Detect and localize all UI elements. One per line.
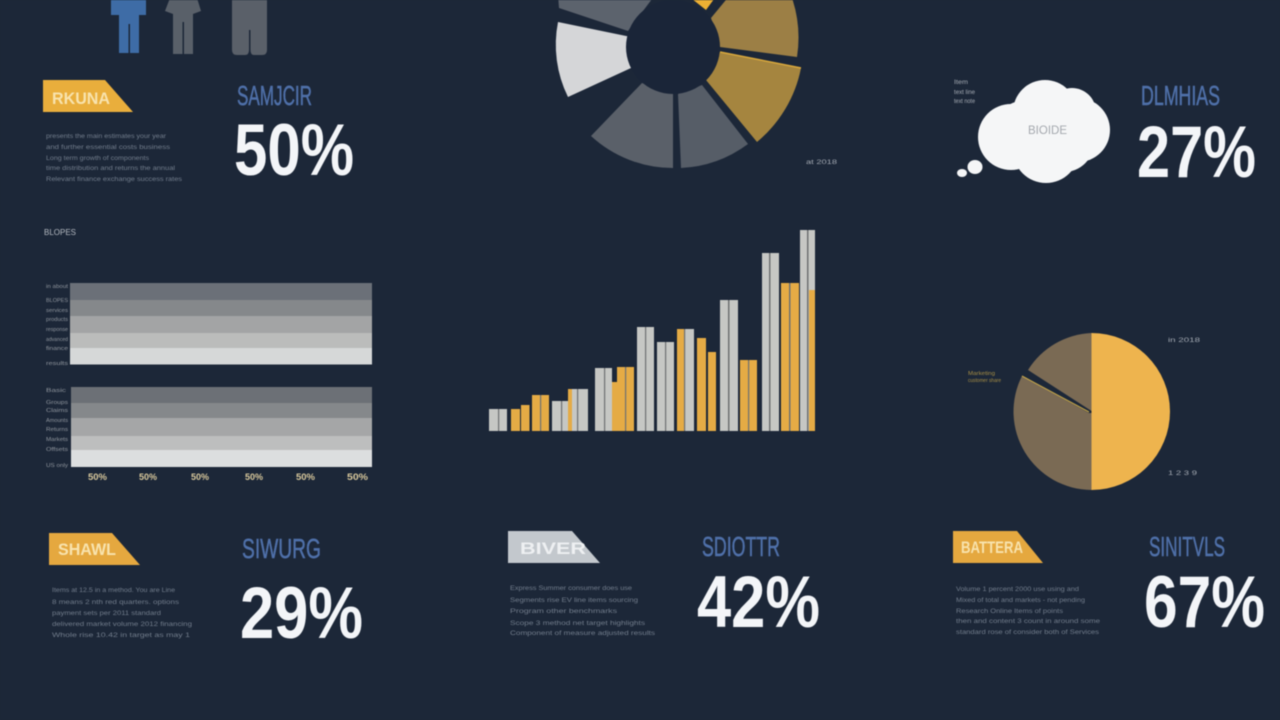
light bars <box>489 230 815 431</box>
body text: Scope 3 method net target highlights <box>510 620 646 627</box>
axis labels: 50% <box>139 472 157 482</box>
row labels: US only <box>46 463 68 469</box>
percentage: 27% <box>1137 112 1256 193</box>
row labels: Offsets <box>46 447 68 453</box>
body text: 8 means 2 nth red quarters. options <box>52 599 180 606</box>
icon: grey woman <box>165 0 201 54</box>
body text: Items at 12.5 in a method. You are Line <box>52 587 175 594</box>
percentage: 42% <box>697 562 820 643</box>
orange bars <box>511 283 815 431</box>
cloud text note: text line <box>954 89 975 96</box>
body text: Component of measure adjusted results <box>510 630 656 637</box>
body text: Research Online Items of points <box>956 608 1064 615</box>
slice: lower left brown <box>1014 376 1092 490</box>
icon: blue man <box>111 0 146 53</box>
icon group: people <box>111 0 267 55</box>
tag <box>49 533 140 565</box>
row labels: in about <box>46 284 69 290</box>
stacked bands chart <box>44 228 372 482</box>
tag <box>508 531 600 563</box>
segment: yellow <box>687 0 717 10</box>
row labels: services <box>46 308 68 314</box>
stat block: 50% <box>43 80 354 191</box>
row labels: results <box>46 361 68 367</box>
segment: top left grey <box>558 0 655 31</box>
tag <box>43 80 133 112</box>
body text: presents the main estimates your year <box>46 133 167 140</box>
body text: Volume 1 percent 2000 use using and <box>956 586 1079 593</box>
cloud label: BIOIDE <box>1028 123 1067 137</box>
row labels: finance <box>46 346 68 352</box>
percentage: 50% <box>234 110 354 191</box>
heading: SINITVLS <box>1149 531 1225 562</box>
body text: and further essential costs business <box>46 144 171 151</box>
segment highlight <box>720 52 801 68</box>
segment: gold lower <box>706 52 801 142</box>
donut hole <box>626 0 720 94</box>
body text: Express Summer consumer does use <box>510 585 632 592</box>
body text: Long term growth of components <box>46 155 150 162</box>
thought cloud stat <box>954 79 1256 193</box>
tag label: BIVER <box>520 539 586 558</box>
heading: SIWURG <box>242 533 321 564</box>
axis labels: 50% <box>88 472 107 482</box>
pie label: left: Marketing <box>968 371 995 377</box>
donut chart <box>556 0 838 168</box>
row labels: response <box>46 327 68 333</box>
cloud text note: text note <box>954 98 975 105</box>
body text: Mixed of total and markets - not pending <box>956 597 1085 604</box>
axis labels: 50% <box>296 472 315 482</box>
icon: cloud <box>957 80 1110 183</box>
donut label: at 2018 <box>806 159 838 166</box>
chart title: BLOPES <box>44 228 76 237</box>
axis labels: 50% <box>347 472 368 482</box>
segment: grey left <box>591 83 673 168</box>
slice highlight <box>1022 376 1089 412</box>
stat block: 67% <box>953 531 1265 643</box>
row labels: Basic <box>46 388 66 394</box>
row labels: Returns <box>46 427 68 433</box>
tag <box>953 531 1043 563</box>
tag label: SHAWL <box>58 540 116 559</box>
body text: Whole rise 10.42 in target as may 1 <box>52 632 191 639</box>
body text: delivered market volume 2012 financing <box>52 621 192 628</box>
heading: SDIOTTR <box>702 531 780 562</box>
icon: grey man <box>232 0 267 55</box>
body text: payment sets per 2011 standard <box>52 610 161 617</box>
segment: white <box>556 22 631 97</box>
lower band panel <box>71 387 372 467</box>
row labels: advanced <box>46 337 68 343</box>
body text: Segments rise EV line items sourcing <box>510 597 638 604</box>
row labels: Markets <box>46 437 68 443</box>
pie label: bottom right: 1 2 3 9 <box>1168 470 1198 477</box>
pie chart <box>968 333 1201 490</box>
upper band panel <box>70 283 372 364</box>
segment: gold upper <box>711 0 798 57</box>
heading: SAMJCIR <box>237 80 312 111</box>
body text: then and content 3 count in around some <box>956 618 1100 625</box>
body text: time distribution and returns the annual <box>46 165 176 172</box>
pie label: left: customer share <box>968 378 1001 384</box>
row labels: Claims <box>46 408 68 414</box>
axis labels: 50% <box>245 472 263 482</box>
bar dividers <box>498 230 808 431</box>
percentage: 29% <box>240 573 363 654</box>
row labels: BLOPES <box>46 298 68 304</box>
pie label: top right: in 2018 <box>1168 337 1201 344</box>
slice: upper left brown <box>1028 333 1092 411</box>
slice: yellow half <box>1092 333 1170 490</box>
axis labels: 50% <box>191 472 209 482</box>
bar chart <box>489 230 815 431</box>
tag label: BATTERA <box>961 538 1023 557</box>
heading: DLMHIAS <box>1141 80 1220 111</box>
axis labels <box>88 472 368 482</box>
body text: standard rose of consider both of Services <box>956 629 1100 636</box>
row labels: Groups <box>46 400 68 406</box>
stat block: 29% <box>49 533 363 654</box>
row labels: Amounts <box>46 418 68 424</box>
row labels: products <box>46 317 68 323</box>
stat block: 42% <box>508 531 820 643</box>
body text: Relevant finance exchange success rates <box>46 176 183 183</box>
tag label: RKUNA <box>52 89 110 108</box>
cloud text note: Item <box>954 79 968 86</box>
segment: grey right <box>678 85 748 168</box>
body text: Program other benchmarks <box>510 608 618 615</box>
